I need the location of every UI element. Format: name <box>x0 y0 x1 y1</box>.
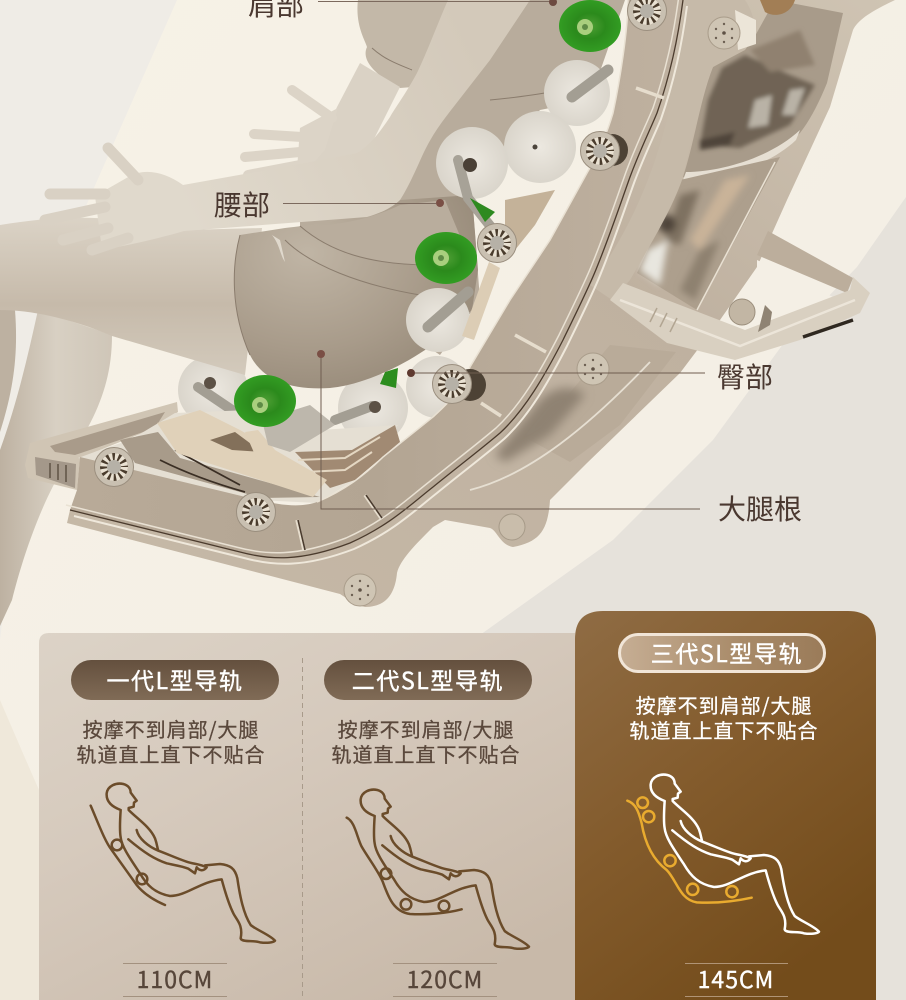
spoked rail wheels <box>94 0 666 532</box>
panel divider <box>302 658 304 1000</box>
badge: first generation L rail <box>71 660 279 700</box>
model torso, hip and thigh <box>0 0 625 388</box>
figure on L rail <box>91 784 275 943</box>
description <box>630 690 818 744</box>
length value: 145CM <box>698 961 774 995</box>
badge: second generation SL rail <box>324 660 532 700</box>
description: 按摩不到肩部/大腿 <box>83 714 259 743</box>
label: waist <box>214 184 444 224</box>
massage chair illustration <box>0 0 895 626</box>
bolts and pivots <box>344 17 740 606</box>
badge: third generation SL rail: 三代SL型导轨 <box>651 635 803 669</box>
rollers behind body <box>178 355 468 443</box>
badge: second generation SL rail: 二代SL型导轨 <box>352 662 504 696</box>
description <box>332 714 520 768</box>
badge: third generation SL rail <box>620 634 824 672</box>
label: hip: 臀部 <box>717 356 773 396</box>
top plate and strip <box>590 0 756 300</box>
length value: 120CM <box>407 961 483 995</box>
description: 按摩不到肩部/大腿 <box>338 714 514 743</box>
green massage rollers <box>234 0 621 427</box>
description: 按摩不到肩部/大腿 <box>636 690 812 719</box>
description: 轨道直上直下不贴合 <box>332 739 520 768</box>
outer frame <box>67 0 895 607</box>
main rail band <box>66 0 687 564</box>
panel: first and second generation background <box>39 633 575 1000</box>
figure on third generation rail <box>627 775 819 934</box>
upper white rollers and brackets <box>406 60 610 352</box>
label: shoulder <box>248 0 557 24</box>
lower glass housing <box>470 157 780 490</box>
far and near legs <box>0 310 112 626</box>
length value: 110CM <box>137 961 213 995</box>
panel: third generation highlighted <box>575 611 876 1000</box>
label: thigh root: 大腿根 <box>718 488 802 528</box>
footrest frame <box>610 231 870 360</box>
description <box>76 714 266 768</box>
label: waist: 腰部 <box>214 184 270 224</box>
panel: first generation <box>71 660 279 996</box>
label: hip <box>407 356 773 396</box>
upper glass housing with mechanism <box>683 0 843 180</box>
badge: first generation L rail: 一代L型导轨 <box>106 662 244 696</box>
label: thigh root <box>317 350 802 528</box>
footrest tray <box>25 402 400 503</box>
panel: second generation <box>324 660 532 996</box>
far arm and hand <box>245 63 400 175</box>
near arm and hand <box>45 0 530 250</box>
description: 轨道直上直下不贴合 <box>76 739 266 768</box>
description: 轨道直上直下不贴合 <box>630 715 818 744</box>
figure on SL rail <box>347 790 529 949</box>
